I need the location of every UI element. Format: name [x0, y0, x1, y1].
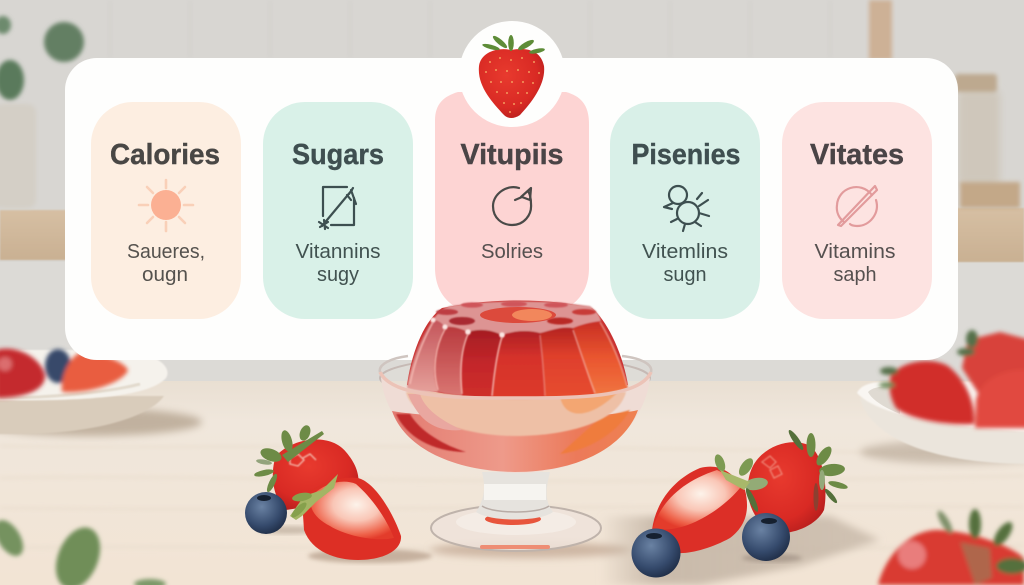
icon: strawberry: [479, 34, 545, 118]
text: sugars detail: sugy: [317, 264, 359, 286]
jelly highlights: [430, 317, 505, 338]
bowl front rim: [380, 372, 651, 398]
main white panel: [65, 58, 958, 360]
jelly rib segments: [407, 302, 628, 399]
panel: pisenies: [610, 102, 760, 319]
wooden table: [0, 381, 1024, 585]
whole strawberry: [254, 424, 359, 510]
heading: vitupiis: Vitupiis: [460, 139, 564, 171]
panel: vitates: [782, 102, 932, 319]
text: vitates detail: Vitamins: [814, 241, 896, 263]
heading: pisenies: Pisenies: [632, 139, 740, 171]
blueberry right: [742, 513, 802, 562]
strawberry cluster: right: [632, 428, 848, 578]
text: vitupiis detail: Solries: [481, 241, 543, 263]
icon: crossed circle: [837, 186, 877, 226]
icon: sun: [139, 180, 193, 231]
badge: white circle with strawberry: [459, 21, 565, 127]
text: pisenies detail: sugn: [664, 264, 706, 286]
text: pisenies detail: Vitemlins: [642, 241, 728, 263]
glass base: [431, 472, 601, 551]
jelly centre hole: [480, 307, 556, 323]
background: wooden shelf: [0, 74, 1024, 262]
panel: calories: [91, 102, 241, 319]
blueberry left: [632, 528, 680, 578]
leaves: bottom left: [0, 515, 166, 585]
cut strawberry: [652, 453, 769, 553]
panel: vitupiis: [435, 92, 589, 312]
icon: sugar square: [319, 187, 356, 229]
blueberry: [245, 492, 287, 534]
text: vitates detail: saph: [834, 264, 876, 286]
text: sugars detail: Vitannins: [296, 241, 380, 263]
shadow under dessert glass: [430, 516, 880, 585]
text: calories detail: Saueres,: [127, 241, 205, 263]
heading: sugars: Sugars: [292, 139, 384, 171]
icon: molecule: [664, 186, 709, 231]
strawberry cluster: left: [245, 424, 432, 563]
icon: round fruit: [493, 187, 531, 225]
plate with strawberries: left: [0, 349, 202, 436]
jelly plateau: [433, 302, 601, 335]
text: calories detail: ougn: [142, 264, 188, 286]
panel: sugars: [263, 102, 413, 319]
strawberry: bottom right corner: [878, 509, 1024, 585]
bowl body with liquid: [381, 378, 650, 473]
plate with strawberries: right: [857, 330, 1024, 464]
heading: vitates: Vitates: [810, 139, 904, 171]
plant pot: top left: [0, 16, 84, 208]
jelly dessert in glass bowl: [380, 300, 651, 551]
whole strawberry: [748, 428, 848, 533]
cut strawberry: [289, 474, 401, 560]
jelly ring bumps: [436, 301, 596, 325]
jelly mould: [407, 300, 628, 399]
bowl back rim: [380, 356, 650, 400]
heading: calories: Calories: [110, 139, 220, 171]
